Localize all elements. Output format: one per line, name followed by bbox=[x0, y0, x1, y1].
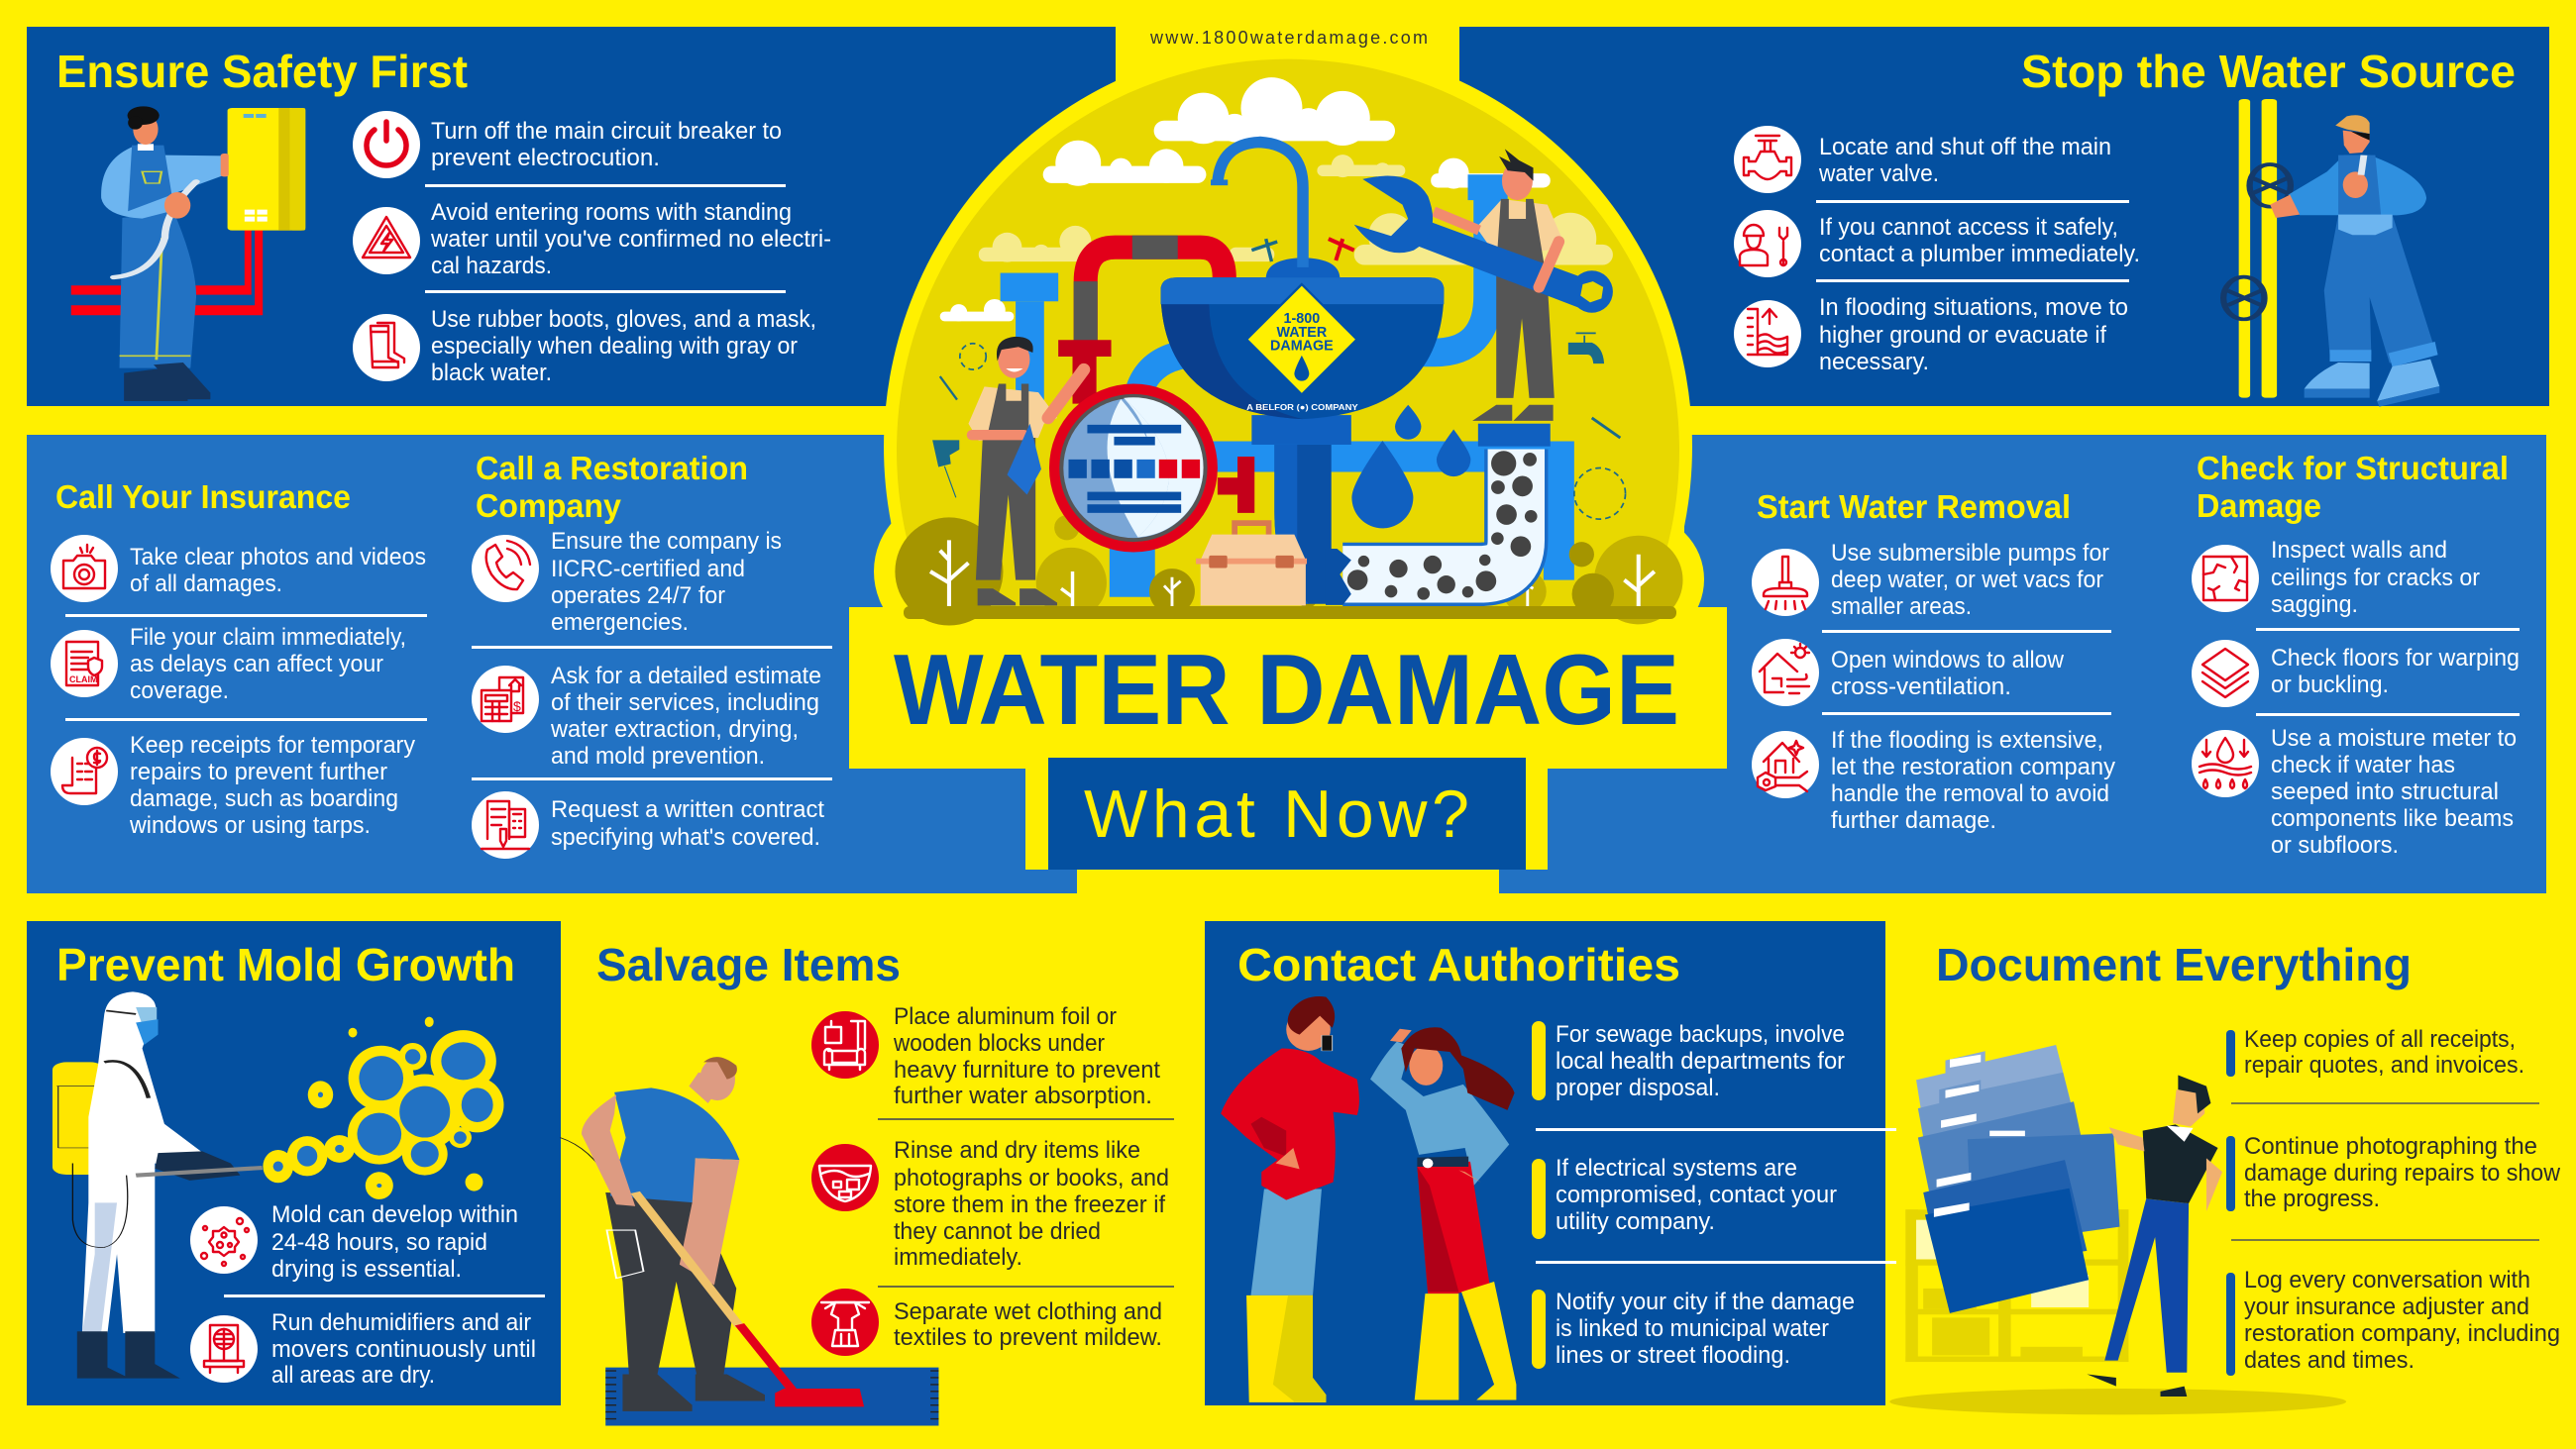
text: mold timing bbox=[271, 1201, 518, 1283]
heading: stop the water source: Stop the Water Source bbox=[2021, 46, 2516, 97]
text: rinse items: Rinse and dry items like bbox=[894, 1137, 1140, 1164]
text: take photos: Take clear photos and videos bbox=[130, 544, 426, 570]
text: inspect walls: Inspect walls and bbox=[2271, 537, 2447, 564]
text: avoid standing water: water until you've confirmed no electri- bbox=[430, 226, 831, 253]
red pipe bbox=[1058, 248, 1225, 404]
bars and text: log conversations: dates and times. bbox=[2244, 1347, 2415, 1374]
shelf bbox=[1905, 1209, 2128, 1362]
bars and text: notify city: lines or street flooding. bbox=[1556, 1342, 1790, 1369]
text: rubber boots: black water. bbox=[431, 360, 552, 386]
text: take photos: of all damages. bbox=[130, 570, 282, 597]
heading: call your insurance: Call Your Insurance bbox=[55, 478, 351, 515]
text: iicrc certified: operates 24/7 for bbox=[551, 582, 725, 609]
text: locate main valve: Locate and shut off the main bbox=[1819, 134, 2111, 160]
text: check floors: or buckling. bbox=[2271, 672, 2389, 698]
icon: electric hazard triangle bbox=[353, 207, 420, 274]
text: mold timing: Mold can develop within bbox=[271, 1201, 518, 1228]
icon: rubber boots bbox=[353, 314, 420, 381]
heading: contact authorities: Contact Authorities bbox=[1237, 939, 1680, 990]
text: avoid standing water bbox=[430, 199, 831, 279]
text: extensive flooding: If the flooding is extensive, bbox=[1831, 727, 2103, 754]
bars and text: continue photographing: the progress. bbox=[2244, 1186, 2380, 1212]
text: keep receipts bbox=[129, 732, 415, 839]
heading: document everything: Document Everything bbox=[1936, 939, 2412, 990]
text: turn off breaker: Turn off the main circuit breaker to bbox=[431, 118, 782, 145]
icon: furniture bbox=[811, 1011, 879, 1079]
bars and text: sewage backups: For sewage backups, involve bbox=[1556, 1021, 1845, 1048]
panel: contact authorities bbox=[1205, 921, 1896, 1405]
text: locate main valve: water valve. bbox=[1818, 160, 1939, 187]
icon: cracked wall bbox=[2192, 545, 2259, 612]
text: moisture meter bbox=[2271, 725, 2517, 859]
toolbox bbox=[1196, 523, 1307, 605]
text: locate main valve bbox=[1818, 134, 2111, 187]
text: detailed estimate: of their services, including bbox=[551, 689, 819, 716]
icon: mold spores bbox=[190, 1206, 258, 1274]
text: higher ground: necessary. bbox=[1819, 349, 1929, 375]
bars and text: notify city bbox=[1532, 1289, 1855, 1369]
illustration: man mopping on rug bbox=[560, 1057, 938, 1425]
text: check floors: Check floors for warping bbox=[2271, 645, 2520, 672]
illustration: two concerned people bbox=[1221, 996, 1516, 1402]
text: detailed estimate: and mold prevention. bbox=[551, 743, 765, 770]
panel: stop the water source bbox=[1459, 27, 2549, 407]
illustration: plumber at valve pipes bbox=[2223, 99, 2439, 407]
text: take photos bbox=[130, 544, 426, 597]
drain pipe with debris bbox=[1326, 424, 1551, 605]
icon: moisture meter bbox=[2192, 730, 2259, 797]
text: iicrc certified: emergencies. bbox=[551, 609, 689, 636]
icon: pump bbox=[1752, 549, 1819, 616]
text: aluminum foil: further water absorption. bbox=[894, 1083, 1152, 1109]
heading: check for structural damage bbox=[2197, 450, 2509, 524]
heading: call a restoration company: Company bbox=[476, 487, 622, 524]
icon: phone bbox=[472, 535, 539, 602]
text: keep receipts: repairs to prevent further bbox=[130, 759, 387, 785]
text: extensive flooding: let the restoration company bbox=[1831, 754, 2115, 780]
text: contact plumber: If you cannot access it safely, bbox=[1819, 214, 2118, 241]
text: higher ground bbox=[1819, 294, 2128, 375]
text: submersible pumps: smaller areas. bbox=[1831, 593, 1972, 620]
man bbox=[2104, 1198, 2189, 1373]
text: written contract: specifying what's covered. bbox=[551, 824, 820, 851]
website url: www.1800waterdamage.com bbox=[1149, 28, 1428, 48]
text: file claim bbox=[130, 624, 406, 704]
bars and text: electrical systems: compromised, contact your bbox=[1556, 1182, 1837, 1208]
bars and text: electrical systems: utility company. bbox=[1556, 1208, 1715, 1235]
water drops bbox=[1351, 405, 1470, 528]
text: higher ground: In flooding situations, move to bbox=[1819, 294, 2128, 321]
text: inspect walls: sagging. bbox=[2271, 591, 2358, 618]
text: moisture meter: or subfloors. bbox=[2271, 832, 2399, 859]
sink with logo: A BELFOR (●) COMPANY bbox=[1246, 402, 1358, 412]
icon: receipt bbox=[51, 738, 118, 805]
text: aluminum foil: Place aluminum foil or bbox=[894, 1003, 1117, 1030]
text: rubber boots: especially when dealing with gray or bbox=[431, 333, 798, 360]
heading: ensure safety first: Ensure Safety First bbox=[56, 46, 468, 97]
text: keep receipts: Keep receipts for temporary bbox=[130, 732, 415, 759]
text: rinse items: they cannot be dried bbox=[894, 1218, 1101, 1245]
water meter bbox=[1049, 384, 1254, 552]
bars and text: continue photographing: damage during repairs to show bbox=[2244, 1160, 2561, 1187]
text: rinse items: store them in the freezer if bbox=[894, 1191, 1165, 1218]
illustration: electrician at breaker box bbox=[71, 106, 305, 401]
text: rinse items: immediately. bbox=[894, 1244, 1022, 1271]
section: salvage items bbox=[560, 939, 1174, 1425]
bars and text: continue photographing: Continue photographing the bbox=[2244, 1133, 2537, 1160]
sink with logo bbox=[1160, 143, 1444, 604]
text: rinse items: photographs or books, and bbox=[894, 1165, 1169, 1191]
icon: plumber bbox=[1734, 210, 1801, 277]
text: aluminum foil: wooden blocks under bbox=[893, 1030, 1105, 1057]
icon: ventilated house bbox=[1752, 639, 1819, 706]
folders bbox=[1916, 1045, 2078, 1151]
worker with wrench bbox=[1354, 149, 1613, 421]
heading: check for structural damage: Check for Structural bbox=[2197, 450, 2509, 486]
bars and text: sewage backups bbox=[1532, 1021, 1845, 1101]
bars and text: log conversations: restoration company, including bbox=[2244, 1320, 2560, 1347]
heading: start water removal: Start Water Removal bbox=[1757, 488, 2071, 525]
bars and text: keep copies: repair quotes, and invoices. bbox=[2244, 1052, 2524, 1079]
bars and text: notify city: is linked to municipal water bbox=[1556, 1315, 1829, 1342]
sink with logo: 1-800 bbox=[1284, 311, 1320, 327]
text: open windows: Open windows to allow bbox=[1831, 647, 2065, 673]
text: file claim: coverage. bbox=[130, 677, 229, 704]
text: open windows: cross-ventilation. bbox=[1831, 673, 2011, 700]
text: moisture meter: Use a moisture meter to bbox=[2271, 725, 2517, 752]
illustration: worker spraying mold bbox=[53, 991, 503, 1379]
icon: hanging clothes bbox=[811, 1289, 879, 1356]
bars and text: sewage backups: proper disposal. bbox=[1556, 1075, 1720, 1101]
illustration: man carrying folders bbox=[1889, 1045, 2346, 1414]
text: open windows bbox=[1831, 647, 2065, 700]
subtitle box: what now bbox=[1048, 758, 1526, 870]
text: dehumidifiers: movers continuously until bbox=[271, 1336, 536, 1363]
text: extensive flooding: handle the removal to avoid bbox=[1831, 780, 2109, 807]
text: dehumidifiers bbox=[271, 1309, 536, 1389]
section: document everything bbox=[1889, 939, 2561, 1414]
bars and text: electrical systems bbox=[1532, 1155, 1837, 1239]
text: inspect walls: ceilings for cracks or bbox=[2271, 565, 2480, 591]
bars and text: log conversations: Log every conversation with bbox=[2244, 1267, 2530, 1294]
text: mold timing: 24-48 hours, so rapid bbox=[271, 1229, 487, 1256]
text: inspect walls bbox=[2271, 537, 2480, 618]
text: detailed estimate bbox=[550, 663, 821, 770]
text: moisture meter: check if water has bbox=[2271, 752, 2455, 778]
text: submersible pumps: deep water, or wet vacs for bbox=[1831, 567, 2103, 593]
sink with logo: DAMAGE bbox=[1270, 339, 1334, 355]
text: detailed estimate: water extraction, drying, bbox=[550, 716, 799, 743]
clouds bbox=[940, 77, 1613, 321]
woman bbox=[1370, 1042, 1509, 1186]
bars and text: keep copies bbox=[2226, 1026, 2524, 1079]
text: higher ground: higher ground or evacuate if bbox=[1819, 322, 2106, 349]
bars and text: continue photographing bbox=[2226, 1133, 2561, 1212]
text: file claim: File your claim immediately, bbox=[130, 624, 406, 651]
text: contact plumber bbox=[1819, 214, 2140, 267]
bars and text: keep copies: Keep copies of all receipts, bbox=[2244, 1026, 2516, 1053]
panel: ensure safety first bbox=[27, 27, 1116, 406]
bars and text: log conversations bbox=[2226, 1267, 2560, 1376]
icon: floor layers bbox=[2192, 640, 2259, 707]
bushes and trees bbox=[895, 515, 1683, 626]
central badge: illustration and title bbox=[849, 27, 1727, 893]
text: submersible pumps bbox=[1831, 540, 2109, 620]
man in red bbox=[1251, 1190, 1322, 1295]
subtitle box: what now: What Now? bbox=[1084, 776, 1469, 852]
text: keep receipts: windows or using tarps. bbox=[129, 812, 371, 839]
text: separate clothing: textiles to prevent mildew. bbox=[894, 1324, 1162, 1351]
panel: prevent mold growth bbox=[27, 921, 561, 1405]
panel: water removal and structural damage bbox=[1499, 435, 2546, 893]
text: iicrc certified: IICRC-certified and bbox=[551, 556, 745, 582]
worker with rag bbox=[968, 337, 1084, 605]
icon: claim form: CLAIM bbox=[69, 674, 97, 684]
text: keep receipts: damage, such as boarding bbox=[130, 785, 398, 812]
heading: salvage items: Salvage Items bbox=[596, 939, 901, 990]
sink with logo: WATER bbox=[1277, 325, 1328, 341]
bars and text: sewage backups: local health departments for bbox=[1556, 1048, 1845, 1075]
text: dehumidifiers: all areas are dry. bbox=[271, 1362, 435, 1389]
text: avoid standing water: Avoid entering rooms with standing bbox=[431, 199, 792, 226]
text: turn off breaker: prevent electrocution. bbox=[431, 145, 660, 171]
bars and text: electrical systems: If electrical systems are bbox=[1556, 1155, 1797, 1182]
text: extensive flooding bbox=[1831, 727, 2115, 834]
text: aluminum foil: heavy furniture to prevent bbox=[894, 1057, 1160, 1084]
text: iicrc certified bbox=[551, 528, 782, 636]
bars and text: log conversations: your insurance adjuster and bbox=[2244, 1294, 2529, 1320]
icon: shut-off valve bbox=[1734, 126, 1801, 193]
text: moisture meter: components like beams bbox=[2271, 805, 2514, 832]
icon: written contract bbox=[472, 791, 539, 859]
icon: claim form bbox=[51, 630, 118, 697]
icon: freezer bowl bbox=[811, 1144, 879, 1211]
yellow badge backing bbox=[849, 27, 1727, 893]
text: iicrc certified: Ensure the company is bbox=[551, 528, 782, 555]
text: rubber boots bbox=[431, 306, 816, 386]
text: moisture meter: seeped into structural bbox=[2271, 778, 2499, 805]
icon: house and wrench bbox=[1752, 731, 1819, 798]
title: water damage: WATER DAMAGE bbox=[894, 635, 1679, 746]
icon: estimate calculator: $ bbox=[513, 698, 521, 714]
text: rubber boots: Use rubber boots, gloves, and a mask, bbox=[431, 306, 816, 333]
heading: prevent mold growth: Prevent Mold Growth bbox=[56, 939, 515, 990]
heading: call a restoration company: Call a Restoration bbox=[476, 450, 748, 486]
icon: estimate calculator bbox=[472, 666, 539, 733]
text: mold timing: drying is essential. bbox=[271, 1256, 462, 1283]
panel: insurance and restoration bbox=[27, 435, 1077, 893]
text: dehumidifiers: Run dehumidifiers and air bbox=[271, 1309, 531, 1336]
text: aluminum foil bbox=[893, 1003, 1160, 1109]
ground bar bbox=[904, 606, 1676, 619]
text: extensive flooding: further damage. bbox=[1831, 807, 1996, 834]
icon: power button bbox=[353, 111, 420, 178]
text: avoid standing water: cal hazards. bbox=[431, 253, 552, 279]
text: turn off breaker bbox=[431, 118, 782, 171]
text: check floors bbox=[2271, 645, 2520, 698]
text: separate clothing bbox=[894, 1298, 1162, 1351]
text: submersible pumps: Use submersible pumps for bbox=[1831, 540, 2109, 567]
text: file claim: as delays can affect your bbox=[130, 651, 383, 677]
icon: dehumidifier bbox=[190, 1315, 258, 1383]
heading: check for structural damage: Damage bbox=[2197, 487, 2321, 524]
illustration: plumbing scene bbox=[895, 77, 1683, 626]
mold bubbles bbox=[263, 1017, 503, 1199]
blue pipes bbox=[1029, 199, 1558, 597]
text: written contract: Request a written contract bbox=[551, 796, 824, 823]
text: detailed estimate: Ask for a detailed estimate bbox=[551, 663, 821, 689]
heading: call a restoration company bbox=[476, 450, 748, 524]
text: written contract bbox=[551, 796, 824, 851]
icon: rising flood level bbox=[1734, 300, 1801, 367]
text: rinse items bbox=[894, 1137, 1169, 1271]
small tools bbox=[933, 333, 1626, 519]
icon: camera bbox=[51, 535, 118, 602]
text: contact plumber: contact a plumber immediately. bbox=[1819, 241, 2140, 267]
bars and text: notify city: Notify your city if the damage bbox=[1556, 1289, 1855, 1315]
text: separate clothing: Separate wet clothing and bbox=[894, 1298, 1162, 1325]
